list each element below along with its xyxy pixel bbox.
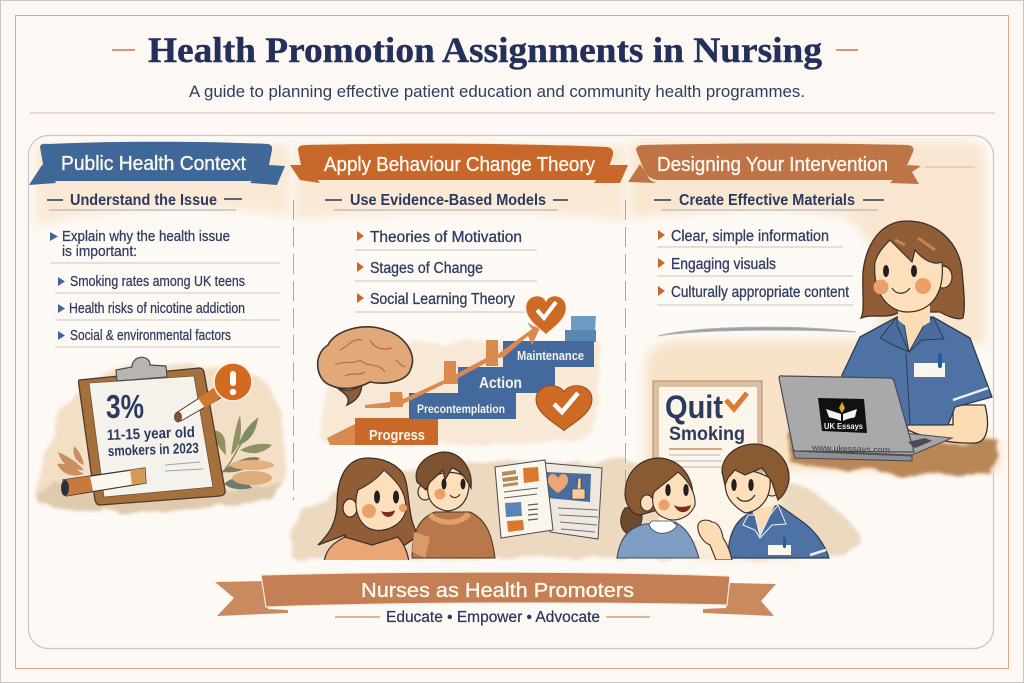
stage: maintenance <box>503 341 594 367</box>
list: smoking factors: Smoking rates among UK teens <box>70 274 245 290</box>
arrow: progress <box>365 322 540 408</box>
list: materials <box>657 228 853 305</box>
logo: UK Essays: UK Essays <box>824 421 863 431</box>
illustration: people and brochure <box>318 444 829 562</box>
arm <box>905 405 988 443</box>
panel: public health context <box>29 142 285 505</box>
banner: nurses as health promoters: Nurses as Health Promoters <box>361 580 634 602</box>
neck <box>898 305 930 332</box>
stage: precontemplation <box>409 393 516 419</box>
figure: nurse talking <box>698 444 829 560</box>
stage: progress <box>355 418 438 445</box>
list: models <box>355 229 537 312</box>
logo: UK Essays <box>818 398 867 433</box>
icon: heart with check (bottom) <box>536 386 592 431</box>
stage: maintenance: Maintenance <box>517 349 584 363</box>
banner: public health context: Public Health Context <box>61 153 246 175</box>
column dividers <box>294 200 626 500</box>
hair back <box>861 221 964 319</box>
banner: designing your intervention: Designing Your Intervention <box>657 154 888 176</box>
stage: precontemplation: Precontemplation <box>417 402 505 416</box>
text block: explain why <box>50 229 280 263</box>
icon: heart with check (top) <box>526 296 566 334</box>
list: materials: Clear, simple information <box>671 228 829 245</box>
poster: quit smoking: Quit <box>665 389 723 425</box>
list: models: Theories of Motivation <box>370 229 522 246</box>
icon: cigarette <box>61 468 146 496</box>
icon: brain <box>318 327 413 405</box>
icon: brochure <box>495 460 602 539</box>
statistic caption <box>107 424 199 460</box>
banner: behaviour change theory: Apply Behaviour Change Theory <box>324 154 595 176</box>
text block: explain why: is important: <box>62 244 137 260</box>
icon: clipboard with statistic <box>78 357 225 505</box>
banner: behaviour change theory <box>290 144 628 183</box>
heading: understand the issue: Understand the Issue <box>70 192 217 209</box>
statistic caption: smokers in 2023 <box>108 441 199 460</box>
poster: quit smoking <box>653 381 762 540</box>
banner: public health context <box>29 142 285 185</box>
icon: laptop: www.ukessays.com <box>811 443 891 455</box>
poster: quit smoking: Smoking <box>669 424 745 445</box>
name badge <box>914 363 945 377</box>
statistic: 3%: 3% <box>106 388 144 425</box>
list: smoking factors: Health risks of nicotine addiction <box>69 301 245 317</box>
banner: nurses as health promoters <box>215 572 776 616</box>
panel: behaviour change theory <box>290 144 628 445</box>
figure: child with ponytail <box>617 458 699 558</box>
list: materials: Engaging visuals <box>671 256 776 273</box>
icon: plants <box>57 415 274 489</box>
title: Health Promotion Assignments in Nursing <box>148 30 822 70</box>
stage: action: Action <box>479 375 522 392</box>
subtitle: A guide to planning effective patient education and community health programmes. <box>189 82 805 101</box>
icon: cigarette and warning <box>174 363 252 422</box>
statistic caption: 11-15 year old <box>107 424 195 444</box>
list: models: Stages of Change <box>370 260 483 277</box>
tagline: Educate • Empower • Advocate <box>386 609 600 626</box>
background washes <box>36 142 1000 560</box>
list: materials: Culturally appropriate content <box>671 284 850 301</box>
list: smoking factors <box>55 274 280 347</box>
desk <box>790 432 1000 475</box>
banner: designing your intervention <box>628 144 975 184</box>
figure: boy <box>412 452 495 558</box>
heading: create effective materials: Create Effective Materials <box>679 192 855 209</box>
figure: girl <box>318 458 419 562</box>
chart: stages staircase <box>327 316 596 445</box>
stage: action <box>458 367 555 393</box>
main panel <box>28 136 994 648</box>
list: smoking factors: Social & environmental factors <box>70 328 231 344</box>
text block: explain why: Explain why the health issue <box>62 229 230 245</box>
stage: progress: Progress <box>369 428 425 444</box>
ear <box>934 266 952 288</box>
list: models: Social Learning Theory <box>370 291 515 308</box>
illustration: nurse at laptop <box>842 221 992 443</box>
uniform <box>842 317 992 425</box>
panel: designing your intervention <box>628 144 1000 540</box>
face <box>875 240 942 312</box>
clipboard clip <box>116 357 167 381</box>
icon: laptop <box>779 376 952 461</box>
heading: use evidence-based models: Use Evidence-Based Models <box>350 192 546 209</box>
stage: top steps <box>565 316 596 341</box>
